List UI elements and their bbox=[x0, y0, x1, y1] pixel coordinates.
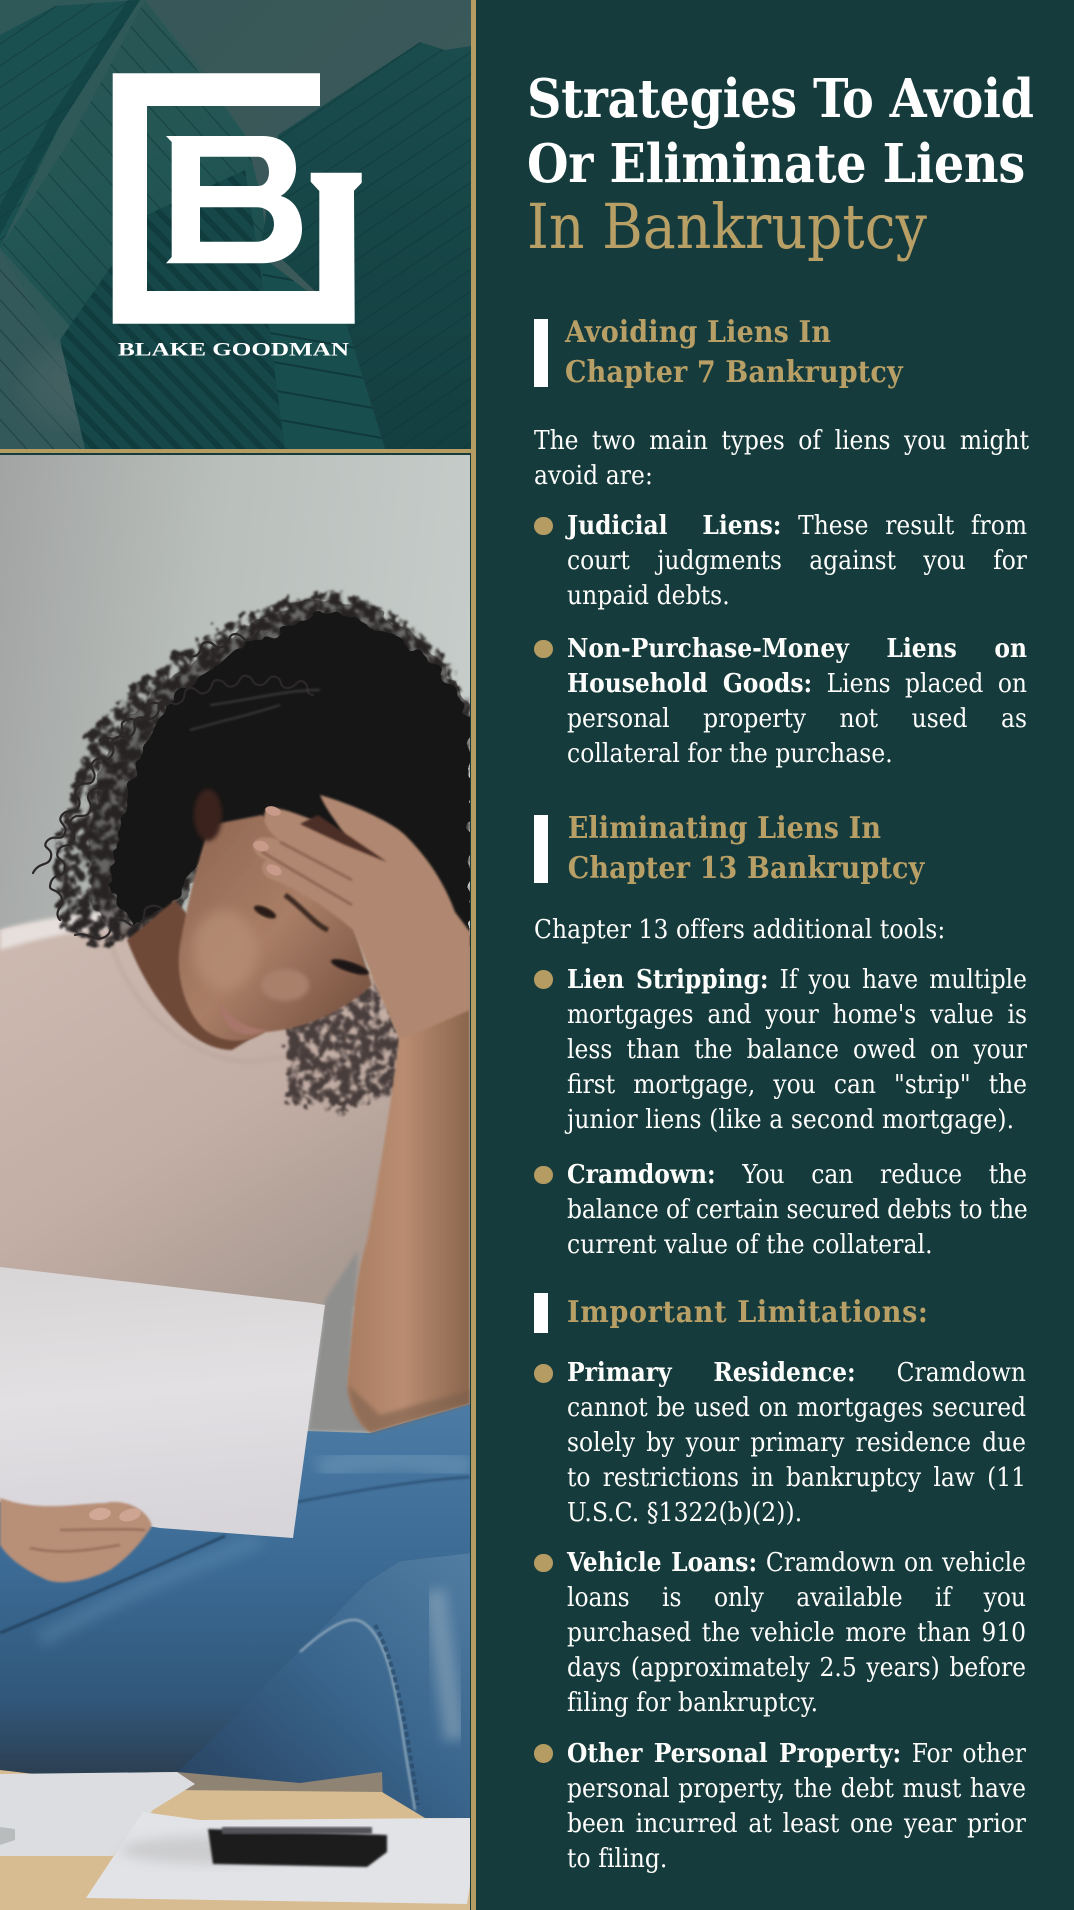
floor behind legs bbox=[150, 1700, 430, 1825]
hair strand highlights bbox=[190, 690, 320, 730]
bullet: non-purchase-money liens: personal property not used as bbox=[567, 704, 1027, 734]
hair curls by the neck bbox=[285, 982, 402, 1112]
bullet: vehicle loans: filing for bankruptcy. bbox=[567, 1688, 818, 1718]
bullet: lien stripping: Lien Stripping: If you have multiple bbox=[567, 965, 1027, 995]
bullet: cramdown: current value of the collateral. bbox=[567, 1230, 933, 1260]
jeans lower leg bbox=[177, 1553, 470, 1820]
heading: Chapter 7: Chapter 7 Bankruptcy bbox=[565, 354, 903, 390]
heading: Chapter 13 bbox=[534, 810, 925, 886]
shirt bbox=[0, 905, 402, 1320]
bullet: non-purchase-money liens: Non-Purchase-Money Liens on bbox=[567, 634, 1027, 664]
intro text: chapter 7: avoid are: bbox=[534, 461, 653, 491]
bullet: primary residence: Primary Residence: Cramdown bbox=[567, 1358, 1026, 1388]
bullet: vehicle loans bbox=[534, 1548, 1026, 1718]
intro text: chapter 13: Chapter 13 offers additional tools: bbox=[534, 915, 945, 945]
bullet: other personal property: been incurred at least one year prior bbox=[567, 1809, 1026, 1839]
bullet: other personal property: Other Personal Property: For other bbox=[567, 1739, 1026, 1769]
bullet: vehicle loans: days (approximately 2.5 years) before bbox=[567, 1653, 1026, 1683]
hair individual curls bbox=[33, 629, 313, 939]
panel: right content background bbox=[476, 0, 1074, 1910]
bullet: vehicle loans: loans is only available if you bbox=[567, 1583, 1026, 1613]
logo mark: bracket letter G bbox=[113, 73, 362, 324]
intro text: chapter 7: The two main types of liens you might bbox=[534, 426, 1029, 456]
heading: Chapter 13: Chapter 13 Bankruptcy bbox=[568, 850, 924, 886]
calculator bbox=[208, 1827, 387, 1867]
icon: Blake Goodman logo bbox=[112, 73, 362, 361]
loose paper right bbox=[86, 1812, 470, 1904]
title: In Bankruptcy bbox=[527, 190, 927, 262]
bullet: cramdown: Cramdown: You can reduce the bbox=[567, 1160, 1027, 1190]
title: Or Eliminate Liens bbox=[527, 133, 1025, 195]
heading: Chapter 13: Eliminating Liens In bbox=[568, 810, 881, 846]
logo wordmark: BLAKE GOODMAN bbox=[118, 340, 349, 361]
bullet: cramdown: balance of certain secured debts to the bbox=[567, 1195, 1028, 1225]
panel: gold frame dividers bbox=[0, 0, 476, 453]
jeans upper leg bbox=[0, 1404, 470, 1774]
bullet: vehicle loans: Vehicle Loans: Cramdown on vehicle bbox=[567, 1548, 1026, 1578]
bullet: non-purchase-money liens bbox=[534, 634, 1027, 769]
bullet: judicial liens bbox=[534, 511, 1027, 611]
hair mid tone bbox=[90, 600, 470, 935]
gold right edge of photo bbox=[471, 453, 476, 1910]
heading: important limitations: Important Limitations: bbox=[567, 1294, 929, 1330]
bullet: lien stripping: first mortgage, you can "strip" the bbox=[567, 1070, 1027, 1100]
heading: Chapter 7: Avoiding Liens In bbox=[565, 314, 831, 350]
bullet: other personal property bbox=[534, 1739, 1026, 1874]
panel: photo of worried woman reading papers bbox=[0, 455, 470, 1910]
bullet: lien stripping: junior liens (like a second mortgage). bbox=[567, 1105, 1014, 1135]
bullet: other personal property: to filing. bbox=[567, 1844, 667, 1874]
intro text: chapter 7 bbox=[534, 426, 1029, 491]
hair dark mass bbox=[110, 612, 470, 960]
lower hand bbox=[0, 1498, 152, 1582]
title bbox=[527, 68, 1034, 262]
bullet: lien stripping: mortgages and your home's value is bbox=[567, 1000, 1027, 1030]
logo mark: letter B bbox=[166, 136, 302, 263]
hair outer curls texture bbox=[55, 592, 470, 948]
device corner bbox=[0, 1827, 15, 1845]
bullet: judicial liens: unpaid debts. bbox=[567, 581, 730, 611]
loose paper left bbox=[0, 1772, 195, 1856]
forearm and upper arm bbox=[347, 930, 470, 1433]
wall bbox=[0, 455, 470, 1435]
bullet: primary residence: cannot be used on mortgages secured bbox=[567, 1393, 1026, 1423]
jeans highlights and creases bbox=[0, 1459, 470, 1810]
bullet: primary residence: to restrictions in bankruptcy law (11 bbox=[567, 1463, 1026, 1493]
neck bbox=[127, 900, 265, 1050]
bullet: primary residence: solely by your primary residence due bbox=[567, 1428, 1026, 1458]
elbow shadow bbox=[348, 1385, 470, 1433]
heading: Chapter 7 bbox=[534, 314, 904, 390]
bullet: non-purchase-money liens: collateral for the purchase. bbox=[567, 739, 893, 769]
bullet: judicial liens: court judgments against you for bbox=[567, 546, 1027, 576]
bullet: vehicle loans: purchased the vehicle more than 910 bbox=[567, 1618, 1026, 1648]
hand on forehead bbox=[252, 795, 470, 1040]
bullet: judicial liens: Judicial Liens: These result from bbox=[567, 511, 1027, 541]
gray wall gap by the elbow bbox=[307, 1250, 370, 1433]
papers held in hand bbox=[0, 1267, 325, 1538]
bullet: other personal property: personal property, the debt must have bbox=[567, 1774, 1026, 1804]
bullet: primary residence bbox=[534, 1358, 1026, 1528]
face bbox=[179, 789, 372, 1041]
table bbox=[0, 1770, 470, 1910]
title: Strategies To Avoid bbox=[527, 68, 1034, 130]
bullet: lien stripping bbox=[534, 965, 1027, 1135]
panel: building photo background bbox=[0, 0, 471, 449]
bullet: non-purchase-money liens: Household Goods: Liens placed on bbox=[567, 669, 1027, 699]
bullet: primary residence: U.S.C. §1322(b)(2)). bbox=[567, 1498, 802, 1528]
bullet: cramdown bbox=[534, 1160, 1028, 1260]
bullet: lien stripping: less than the balance owed on your bbox=[567, 1035, 1027, 1065]
